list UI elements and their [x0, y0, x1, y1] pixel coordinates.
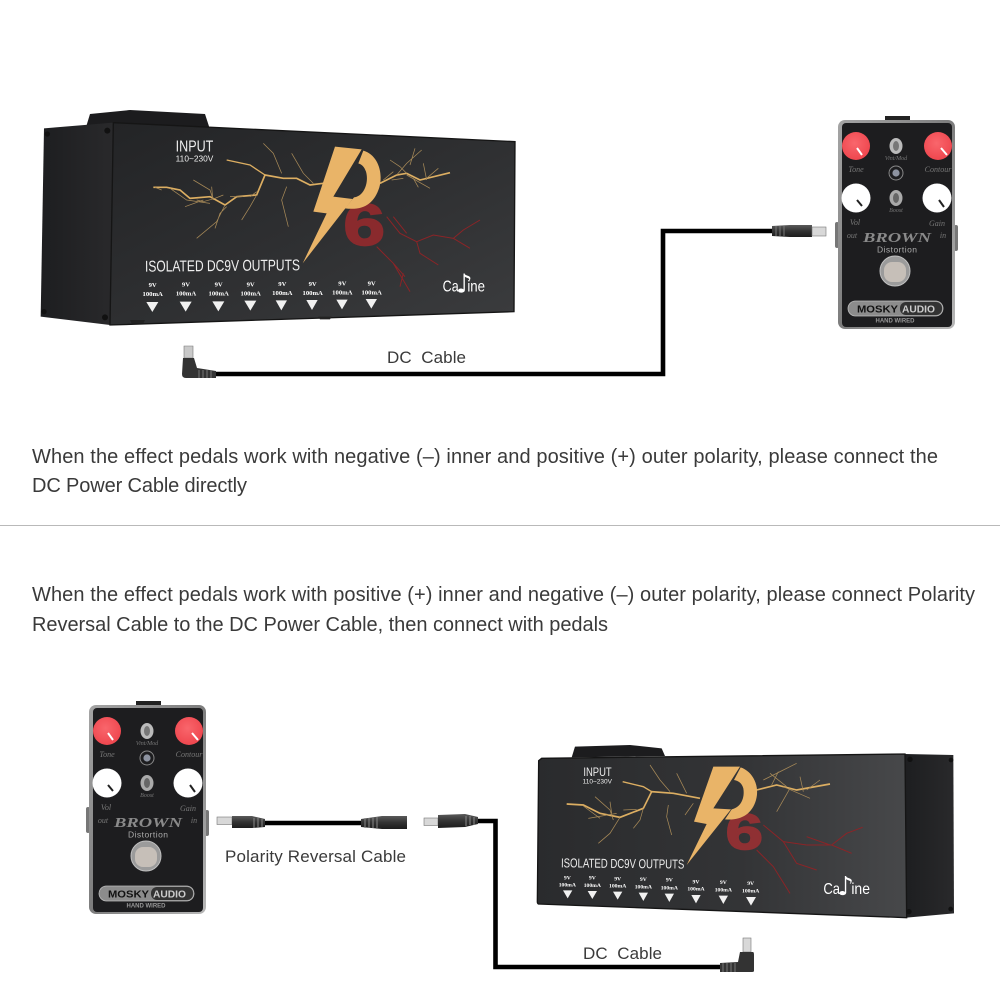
effect pedal: bottom: in — [191, 816, 197, 825]
power supply unit: bottom: 9V — [666, 878, 674, 884]
power supply unit: top: 100mA — [272, 290, 293, 297]
power supply unit: bottom: 100mA — [715, 887, 733, 893]
power supply unit: bottom: 9V — [747, 881, 755, 887]
power supply unit: top: 100mA — [361, 289, 382, 296]
effect pedal: top — [835, 116, 958, 329]
power supply unit: top: ine — [467, 279, 485, 296]
power supply unit: top: 110~230V — [176, 154, 214, 164]
power supply unit: bottom: 9V — [614, 876, 622, 882]
power supply unit: top: 6 — [343, 193, 385, 258]
power supply unit: top: 100mA — [142, 291, 163, 298]
effect pedal: bottom: MOSKY — [108, 888, 149, 900]
effect pedal: bottom: HAND WIRED — [126, 904, 166, 910]
power supply unit: top: 9V — [368, 280, 376, 287]
power supply unit: bottom: 6 — [726, 804, 763, 860]
power supply unit: bottom: 100mA — [742, 888, 760, 894]
effect pedal: top: Distortion — [877, 244, 917, 254]
instruction: polarity reversal connection: Reversal Cable to the DC Power Cable, then connect with pedals — [32, 614, 608, 636]
DC cable: bottom — [424, 814, 754, 972]
power supply unit: bottom: 100mA — [559, 882, 577, 888]
effect pedal: top: Vol — [850, 218, 861, 227]
label: polarity reversal cable: Polarity Reversal Cable — [225, 847, 406, 866]
instruction: polarity reversal connection: When the effect pedals work with positive (+) inner and negative (–) outer polarity, please connect Polarity — [32, 584, 975, 606]
power supply unit: top: 9V — [278, 281, 287, 288]
power supply unit: top: 9V — [215, 282, 223, 289]
label: DC cable top: DC Cable — [387, 348, 466, 367]
power supply unit: top: Ca — [443, 279, 459, 296]
power supply unit: top: 100mA — [208, 291, 229, 298]
power supply unit: bottom: Ca — [823, 881, 840, 898]
effect pedal: top: BROWN — [862, 231, 932, 246]
effect pedal: top: MOSKY — [857, 304, 898, 316]
power supply unit: top: ♪ — [456, 270, 473, 300]
power supply unit: top: 9V — [338, 281, 347, 288]
power supply unit: bottom: 9V — [564, 875, 572, 881]
power supply unit: top — [41, 110, 515, 325]
power supply unit: top: INPUT — [176, 139, 214, 156]
effect pedal: bottom: Boost — [140, 793, 154, 799]
effect pedal: bottom: out — [98, 816, 109, 825]
power supply unit: top: ISOLATED DC9V OUTPUTS — [145, 257, 300, 276]
power supply unit: top: 100mA — [302, 290, 323, 297]
instruction: polarity reversal connection — [32, 584, 975, 636]
effect pedal: bottom: Gain — [180, 804, 196, 813]
power supply unit: top: 9V — [182, 282, 190, 289]
power supply unit: bottom: 100mA — [661, 885, 679, 891]
effect pedal: bottom: Tone — [99, 750, 115, 759]
power supply unit: bottom: 9V — [589, 876, 597, 882]
power supply unit: bottom: 100mA — [687, 886, 706, 892]
effect pedal: bottom: Distortion — [128, 830, 168, 840]
effect pedal: top: Tone — [848, 165, 864, 174]
power supply unit: bottom: 110~230V — [583, 778, 613, 785]
effect pedal: top: Contour — [925, 165, 952, 174]
power supply unit: bottom — [537, 745, 954, 918]
effect pedal: bottom: Contour — [176, 750, 203, 759]
effect pedal: top: AUDIO — [902, 304, 935, 316]
effect pedal: top: HAND WIRED — [876, 318, 915, 324]
power supply unit: bottom: 100mA — [635, 884, 653, 890]
effect pedal: bottom — [86, 701, 209, 914]
effect pedal: bottom: AUDIO — [153, 888, 186, 900]
effect pedal: bottom: Vint/Mod — [136, 741, 159, 747]
instruction: direct connection: DC Power Cable directly — [32, 475, 247, 497]
polarity reversal cable — [217, 816, 407, 829]
power supply unit: bottom: 9V — [693, 879, 700, 885]
power supply unit: bottom: INPUT — [583, 765, 612, 779]
power supply unit: top: 100mA — [240, 290, 261, 297]
power supply unit: bottom: 9V — [640, 877, 648, 883]
power supply unit: top: 9V — [247, 281, 255, 288]
power supply unit: bottom: 100mA — [584, 883, 602, 889]
effect pedal: bottom: Vol — [101, 803, 112, 812]
effect pedal: bottom: BROWN — [113, 816, 183, 831]
power supply unit: bottom: 9V — [720, 880, 728, 886]
label: DC cable bottom: DC Cable — [583, 944, 662, 963]
effect pedal: top: out — [847, 231, 858, 240]
effect pedal: top: in — [940, 231, 946, 240]
power supply unit: bottom: 100mA — [609, 884, 627, 890]
power supply unit: top: 100mA — [176, 291, 196, 298]
power supply unit: top: 9V — [309, 281, 317, 288]
effect pedal: top: Boost — [889, 208, 903, 214]
effect pedal: top: Gain — [929, 219, 945, 228]
instruction: direct connection — [32, 446, 938, 497]
power supply unit: bottom: ISOLATED DC9V OUTPUTS — [561, 855, 685, 872]
DC cable: top — [182, 225, 826, 378]
power supply unit: top: 100mA — [332, 290, 353, 297]
power supply unit: bottom: ♪ — [837, 872, 854, 902]
effect pedal: top: Vint/Mod — [885, 156, 908, 162]
instruction: direct connection: When the effect pedals work with negative (–) inner and positive (+) outer polarity, please connect the — [32, 446, 938, 468]
power supply unit: bottom: ine — [851, 881, 870, 898]
power supply unit: top: 9V — [149, 282, 157, 289]
